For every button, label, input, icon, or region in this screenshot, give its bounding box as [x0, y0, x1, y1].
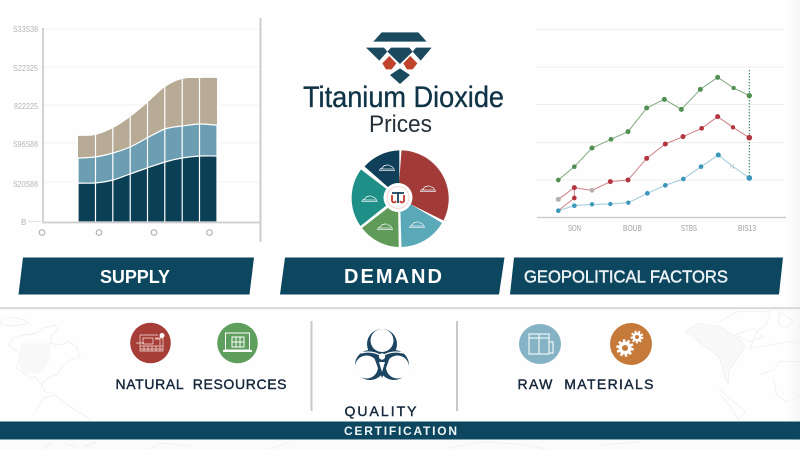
pie segment: light blue	[400, 198, 442, 247]
column divider left	[310, 321, 312, 411]
blue layer	[78, 124, 217, 222]
label: natural resources: NATURAL RESOURCES	[116, 376, 286, 392]
x axis labels: BOUB	[623, 224, 642, 233]
pie centre icon	[392, 192, 404, 203]
section divider	[0, 307, 800, 309]
y axis labels: 822225	[14, 102, 38, 111]
pie segment: navy	[364, 150, 399, 197]
pie chart	[352, 150, 449, 247]
icon: biohazard quality mark	[355, 329, 409, 380]
bar separators	[96, 74, 200, 222]
tan layer	[78, 78, 217, 222]
y axis labels: S20S88	[13, 180, 38, 189]
icon: natural resources green	[217, 323, 258, 363]
icon: raw materials blue	[519, 324, 561, 364]
dotted marker line	[748, 70, 751, 178]
footer bar	[0, 422, 800, 440]
blue series: N	[730, 163, 735, 170]
icon: natural resources red	[130, 323, 171, 363]
banner: supply: SUPPLY	[100, 267, 170, 287]
icon: raw materials orange gears	[610, 323, 652, 365]
chart gridlines	[536, 30, 785, 180]
y axis labels: S96S88	[13, 140, 38, 149]
red series	[556, 114, 752, 211]
subtitle: Prices	[369, 111, 432, 138]
chart x axis	[537, 216, 786, 218]
logo: diamond	[366, 32, 432, 84]
green series	[556, 75, 752, 182]
chart edge cover	[76, 74, 219, 222]
label: raw materials: RAW MATERIALS	[518, 376, 654, 392]
stacked area bar chart: supply	[13, 25, 260, 235]
world map watermark: left	[0, 317, 97, 448]
column divider right	[456, 321, 458, 411]
y axis labels	[13, 25, 38, 227]
footer bar: CERTIFICATION	[344, 424, 457, 438]
x axis labels: BIS13	[738, 224, 756, 233]
pie centre	[384, 183, 412, 212]
x axis markers	[39, 230, 212, 235]
world map watermark: right	[685, 312, 800, 420]
label: quality: QUALITY	[344, 403, 417, 419]
y axis labels: S33S38	[13, 25, 38, 34]
pie segment icons	[362, 165, 436, 230]
pie segment: green	[362, 200, 399, 247]
navy layer	[78, 156, 217, 222]
y axis labels: B	[21, 218, 26, 227]
world map watermark: bottom strip	[44, 442, 640, 449]
chart axes	[28, 28, 260, 222]
x axis labels	[568, 224, 756, 233]
banner: demand	[280, 258, 504, 294]
panel divider	[260, 18, 262, 242]
blue series	[556, 152, 752, 213]
x axis labels: SON	[568, 224, 581, 233]
pie segment: teal	[352, 170, 397, 226]
title: Titanium Dioxide	[303, 81, 504, 114]
banner: supply	[18, 258, 254, 294]
line chart: geopolitical factors	[536, 30, 786, 233]
banner: demand: DEMAND	[344, 266, 442, 288]
y axis labels: S22325	[13, 64, 38, 73]
chart gridlines	[44, 29, 260, 182]
pie segment: red	[398, 150, 449, 220]
x axis labels: STBS	[681, 224, 697, 233]
banner: geopolitical factors: GEOPOLITICAL FACTORS	[524, 266, 728, 286]
banner: geopolitical factors	[510, 258, 783, 294]
